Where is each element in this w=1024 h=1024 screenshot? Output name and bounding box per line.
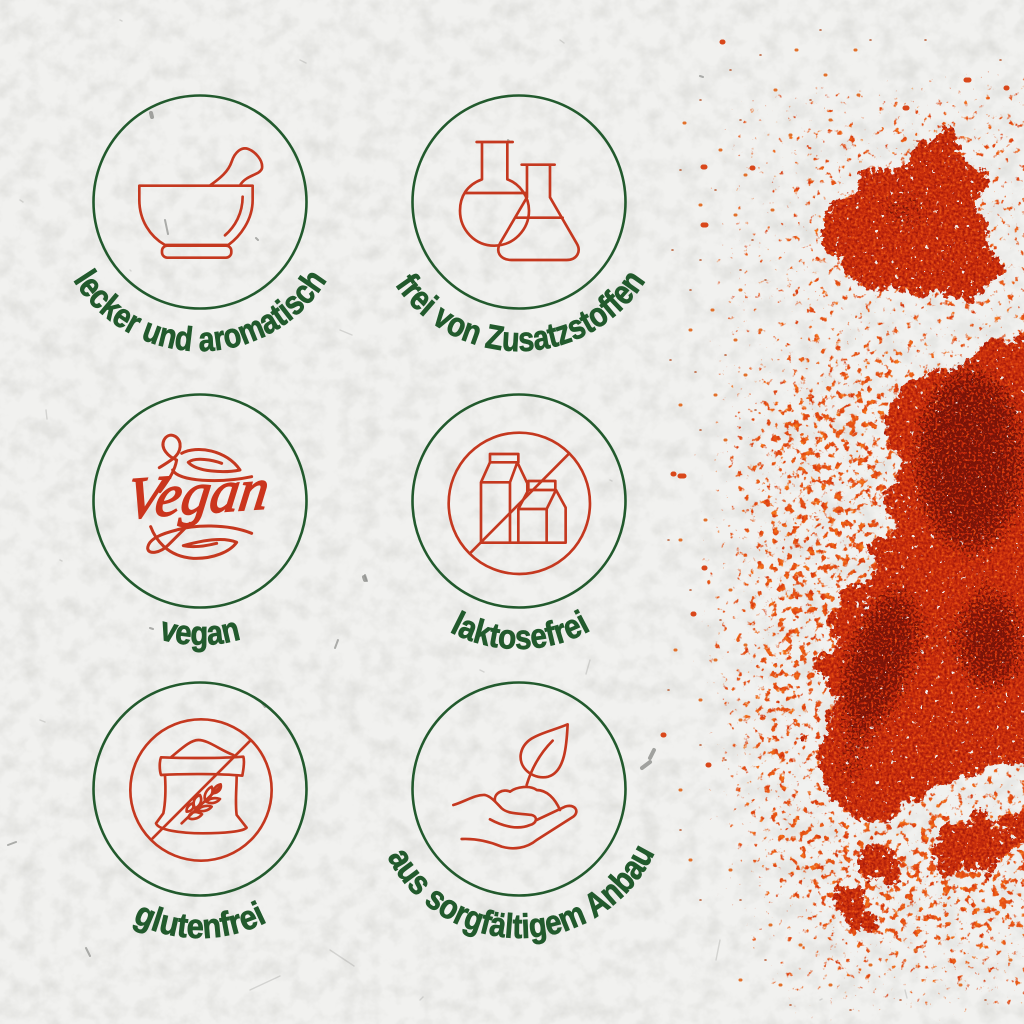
- icon: crossed flour sack: [130, 719, 272, 861]
- badge ring: [94, 96, 306, 308]
- badge: glutenfrei: [92, 681, 308, 939]
- badge: vegan: [92, 393, 308, 652]
- loose flakes: [663, 30, 1011, 1010]
- icon: crossed milk cartons: [449, 433, 590, 574]
- badge ring: [94, 682, 306, 896]
- label: aus sorgfältigem Anbau: [388, 845, 654, 944]
- icon: vegan lettering: [123, 435, 273, 558]
- icon: hand holding seedling: [453, 724, 576, 848]
- badge: frei von Zusatzstoffen: [396, 94, 646, 352]
- icon: lab flasks: [460, 142, 579, 260]
- badge: laktosefrei: [411, 393, 627, 650]
- powder dark shading: [810, 175, 1024, 919]
- label: vegan: [162, 621, 240, 652]
- icon: mortar and pestle: [139, 148, 262, 258]
- badge ring: [412, 682, 626, 896]
- badge ring: [412, 96, 626, 308]
- badge: lecker und aromatisch: [74, 94, 327, 352]
- label: laktosefrei: [450, 608, 590, 650]
- badge: aus sorgfaeltigem Anbau: [388, 681, 654, 944]
- vegan word: Vegan: [123, 455, 273, 531]
- vegan flourishes: [148, 435, 252, 558]
- label: lecker und aromatisch: [74, 268, 327, 352]
- badge ring: [94, 394, 306, 608]
- paprika powder pile: [663, 30, 1024, 1024]
- badge ring: [412, 394, 626, 608]
- label: frei von Zusatzstoffen: [396, 273, 646, 352]
- powder scatter halo: [690, 50, 1024, 1024]
- powder mass: [806, 130, 1024, 929]
- label: glutenfrei: [132, 900, 266, 939]
